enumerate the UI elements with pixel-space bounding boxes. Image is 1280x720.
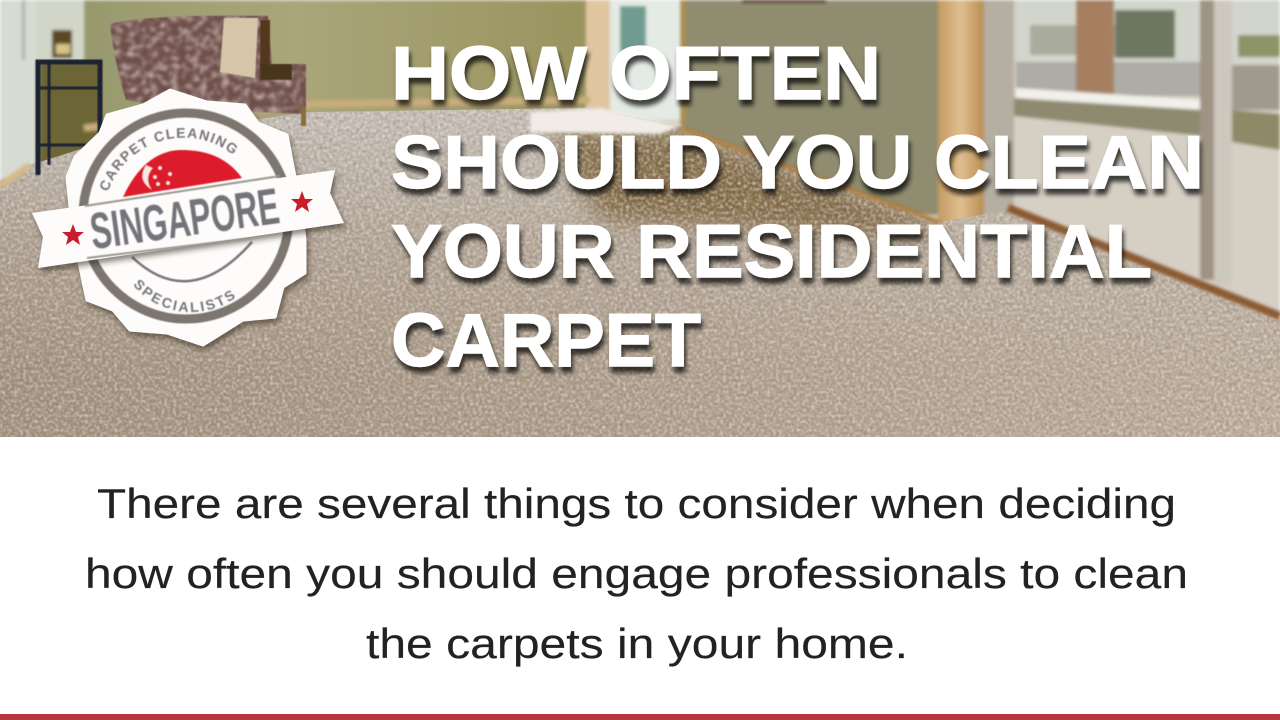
badge scalloped seal	[67, 90, 305, 345]
armchair	[105, 10, 310, 126]
logo badge	[32, 88, 348, 354]
inner arc line	[132, 242, 252, 281]
ribbon	[32, 170, 344, 268]
left star	[62, 224, 84, 245]
curved text: specialists: SPECIALISTS	[134, 279, 236, 313]
floor glare and skirting	[0, 108, 1280, 316]
intro line 1: There are several things to consider when deciding	[97, 480, 1176, 527]
title	[391, 31, 1204, 382]
badge ring	[83, 113, 289, 319]
title line 2: SHOULD YOU CLEAN	[391, 120, 1204, 204]
flag red half	[123, 150, 242, 197]
right star	[291, 191, 313, 212]
room walls and windows	[0, 0, 1280, 320]
carpet reflection	[550, 128, 940, 240]
hero photo: carpeted room	[0, 0, 1280, 437]
ribbon text: Singapore: SINGAPORE	[87, 177, 283, 260]
carpet floor with texture	[0, 100, 1280, 437]
intro line 2: how often you should engage professionals to clean	[85, 550, 1188, 597]
intro line 3: the carpets in your home.	[366, 620, 908, 667]
bottom red bar	[0, 714, 1280, 720]
title line 4: CARPET	[391, 298, 701, 382]
side table	[38, 62, 100, 175]
curved text: carpet cleaning: CARPET CLEANING	[100, 127, 238, 191]
title line 3: YOUR RESIDENTIAL	[391, 209, 1152, 293]
flag crescent and stars	[142, 165, 172, 190]
title line 1: HOW OFTEN	[391, 31, 881, 115]
intro text block	[85, 480, 1188, 667]
ribbon lines	[85, 176, 280, 258]
